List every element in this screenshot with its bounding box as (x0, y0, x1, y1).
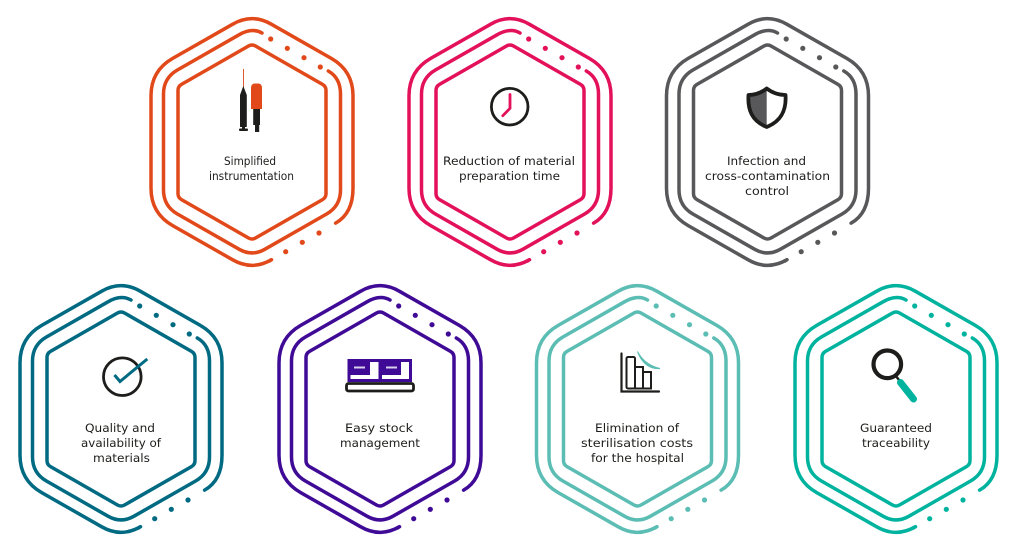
label: easy stock management: management (340, 436, 420, 450)
hexagon frame: grey (666, 19, 868, 265)
label: infection and cross-contamination control: Infection and (727, 154, 806, 168)
icon: stock drawers on a tray (346, 360, 414, 391)
label: guaranteed traceability: traceability (862, 436, 930, 450)
icon: clock (491, 88, 528, 125)
label: quality and availability of materials: materials (93, 451, 150, 465)
label: simplified instrumentation: Simplified (224, 154, 276, 168)
label: guaranteed traceability: Guaranteed (860, 421, 932, 435)
hexagon frame: crimson (409, 19, 611, 265)
icon: magnifying glass (874, 350, 914, 399)
hexagon frame: orange (151, 19, 353, 265)
hexagon frame: dark teal (20, 286, 222, 532)
hexagon frame: teal green (795, 286, 997, 532)
panel: quality and availability of materials (20, 286, 222, 532)
label: simplified instrumentation: instrumentation (209, 169, 294, 183)
label: elimination of sterilisation costs for the hospital: for the hospital (591, 451, 684, 465)
label: reduction of material preparation time: Reduction of material (443, 154, 575, 168)
panel: easy stock management (279, 286, 481, 532)
icon: shield (748, 88, 786, 127)
label: infection and cross-contamination control: control (745, 184, 789, 198)
label: elimination of sterilisation costs for the hospital: sterilisation costs (581, 436, 693, 450)
icon: declining bar chart (622, 352, 660, 392)
icon: check mark in circle (104, 358, 147, 396)
panel: simplified instrumentation (151, 19, 353, 265)
panel: guaranteed traceability (795, 286, 997, 532)
label: infection and cross-contamination control: cross-contamination (705, 169, 830, 183)
label: elimination of sterilisation costs for the hospital: Elimination of (595, 421, 680, 435)
hexagon frame: purple (279, 286, 481, 532)
hexagon frame: light teal (536, 286, 738, 532)
panel: elimination of sterilisation costs (536, 286, 738, 532)
label: easy stock management: Easy stock (345, 421, 413, 435)
label: quality and availability of materials: Quality and (85, 421, 155, 435)
panel: infection and cross-contamination control (666, 19, 868, 265)
label: reduction of material preparation time: preparation time (459, 169, 560, 183)
label: quality and availability of materials: availability of (81, 436, 162, 450)
panel: reduction of material preparation time (409, 19, 611, 265)
icon: syringe and screwdriver (239, 69, 262, 132)
